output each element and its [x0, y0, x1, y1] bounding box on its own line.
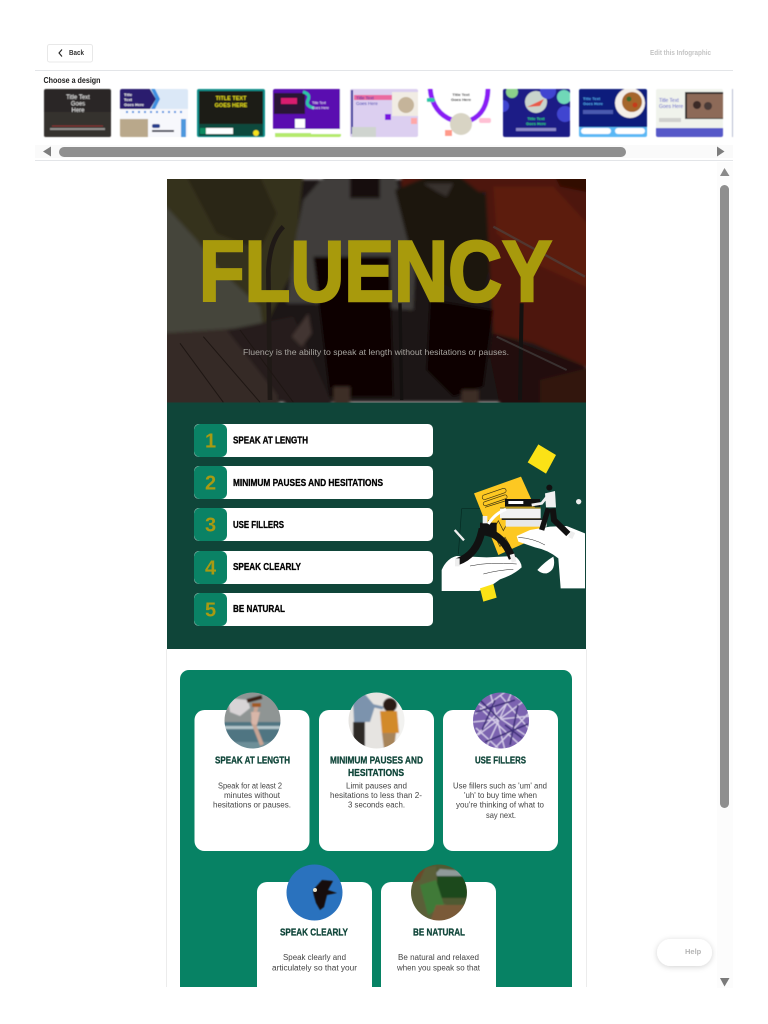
- thumbnail 1: Title Text: [66, 95, 90, 101]
- vertical scrollbar: [717, 162, 733, 988]
- thumbnail 1: [44, 89, 111, 137]
- outline window: [458, 509, 480, 554]
- list item 5: BE NATURAL: [233, 604, 285, 615]
- list item 3: 3: [205, 514, 216, 536]
- photo: eagle in blue sky: [286, 864, 343, 921]
- heading: USE FILLERS: [475, 756, 526, 766]
- thumbnail 3: GOES HERE: [215, 103, 248, 109]
- thumbnail 7: Goes Here: [526, 121, 547, 126]
- description: minutes without: [224, 791, 281, 800]
- heading: [330, 756, 423, 776]
- hero panel: [160, 173, 593, 407]
- books: [505, 499, 540, 507]
- horizontal scrollbar: [35, 145, 733, 160]
- description: Be natural and relaxed: [398, 953, 479, 962]
- thumbnail 6: Title Text: [452, 92, 470, 97]
- list item 5: [194, 593, 433, 626]
- right person: [532, 485, 575, 539]
- edit link: Edit this Infographic: [650, 50, 711, 57]
- description: you're thinking of what to: [456, 800, 545, 810]
- thumbnail 2: Text: [124, 97, 133, 102]
- card: use fillers: [443, 690, 558, 851]
- thumbnail 3: TITLE TEXT: [216, 96, 247, 102]
- back button: Back: [69, 50, 84, 57]
- description: hesitations or pauses.: [213, 800, 291, 810]
- card: be natural: [381, 864, 496, 987]
- yellow diamond: [528, 444, 556, 474]
- list item 5: 5: [205, 600, 216, 622]
- infographic page edges: [166, 649, 586, 987]
- photo: dancer on beach: [224, 692, 280, 748]
- design thumbnails: [44, 83, 733, 137]
- thumbnail 2: Goes Here: [124, 102, 145, 107]
- list item 4: SPEAK CLEARLY: [233, 562, 301, 573]
- title: FLUENCY: [199, 224, 552, 320]
- description: [396, 953, 481, 972]
- photo: two people: [348, 692, 404, 748]
- yellow paper: [474, 477, 547, 555]
- list item 1: [194, 424, 433, 457]
- photo: overgrown cabin: [411, 864, 467, 920]
- heading: SPEAK AT LENGTH: [215, 756, 290, 766]
- thumbnail 8: Title Text: [583, 96, 601, 101]
- list item 1: 1: [205, 430, 216, 452]
- description: [453, 782, 547, 820]
- heading: MINIMUM PAUSES AND: [330, 756, 423, 766]
- small yellow square: [480, 584, 497, 602]
- thumbnail 8: [579, 88, 647, 137]
- subtitle: Fluency is the ability to speak at length without hesitations or pauses.: [243, 347, 509, 357]
- white semicircle: [537, 557, 554, 573]
- photo: purple fibres: [473, 692, 529, 748]
- description: [213, 782, 291, 810]
- description: 'uh' to buy time when: [464, 791, 537, 800]
- thumbnail 4: Goes Here: [312, 106, 329, 110]
- hero photo: [160, 173, 593, 407]
- thumbnail 9: [656, 89, 723, 137]
- description: say next.: [486, 811, 516, 820]
- thumbnail 1: Goes: [71, 102, 85, 108]
- heading: HESITATIONS: [348, 768, 404, 779]
- list item 3: [194, 508, 433, 541]
- list item 3: USE FILLERS: [233, 520, 284, 531]
- thumbnail 5: Goes Here: [356, 101, 378, 106]
- help button: Help: [685, 947, 702, 956]
- card: speak clearly: [257, 864, 372, 987]
- list panel: [167, 402, 586, 649]
- illustration: people carrying books between hands: [442, 444, 585, 602]
- list item 2: 2: [205, 472, 216, 494]
- description: Speak clearly and: [283, 953, 346, 962]
- card: minimum pauses and hesitations: [319, 690, 434, 851]
- description: when you speak so that: [396, 964, 481, 972]
- design chooser heading: Choose a design: [44, 75, 100, 85]
- thumbnail 2: [120, 89, 188, 137]
- description: 3 seconds each.: [348, 800, 405, 810]
- small white star: [576, 499, 581, 504]
- thumbnail 5: Title Text: [356, 96, 375, 100]
- description: Use fillers such as 'um' and: [453, 782, 547, 790]
- back button: [48, 44, 92, 62]
- right hand: [517, 526, 585, 588]
- left person: [455, 509, 516, 566]
- thumbnail 1: Here: [71, 108, 85, 114]
- thumbnail 4: [273, 89, 341, 137]
- thumbnail 5: [350, 89, 418, 137]
- description: [330, 782, 422, 808]
- list item 4: [194, 551, 433, 584]
- help button: [657, 939, 712, 966]
- thumbnail 7: [502, 88, 571, 138]
- white dash: [455, 530, 464, 540]
- description: hesitations to less than 2-: [330, 791, 422, 800]
- panel: detail cards: [180, 670, 572, 987]
- description: Speak for at least 2: [218, 782, 283, 790]
- card: speak at length: [194, 690, 310, 851]
- thumbnail 10 partial: [732, 89, 733, 137]
- description: Limit pauses and: [346, 782, 407, 790]
- thumbnail 3: [197, 89, 265, 137]
- thumbnail 9: Title Text: [659, 98, 679, 104]
- list item 1: SPEAK AT LENGTH: [233, 436, 308, 446]
- description: articulately so that your: [272, 964, 357, 972]
- thumbnail 8: Goes Here: [583, 101, 604, 106]
- list item 2: MINIMUM PAUSES AND HESITATIONS: [233, 478, 383, 489]
- left hand: [442, 556, 522, 591]
- list item 2: [194, 466, 433, 499]
- description: [272, 953, 357, 972]
- header bar: [35, 44, 733, 70]
- heading: BE NATURAL: [413, 928, 465, 938]
- thumbnail 4: Title Text: [312, 101, 326, 105]
- thumbnail 6: Goes Here: [451, 97, 472, 102]
- thumbnail 9: Goes Here: [659, 104, 683, 110]
- list item 4: 4: [205, 558, 217, 580]
- thumbnail 6: [426, 87, 494, 137]
- thumbnail 2: Title: [124, 92, 133, 97]
- thumbnail 7: Title Text: [527, 116, 545, 121]
- heading: SPEAK CLEARLY: [280, 928, 348, 938]
